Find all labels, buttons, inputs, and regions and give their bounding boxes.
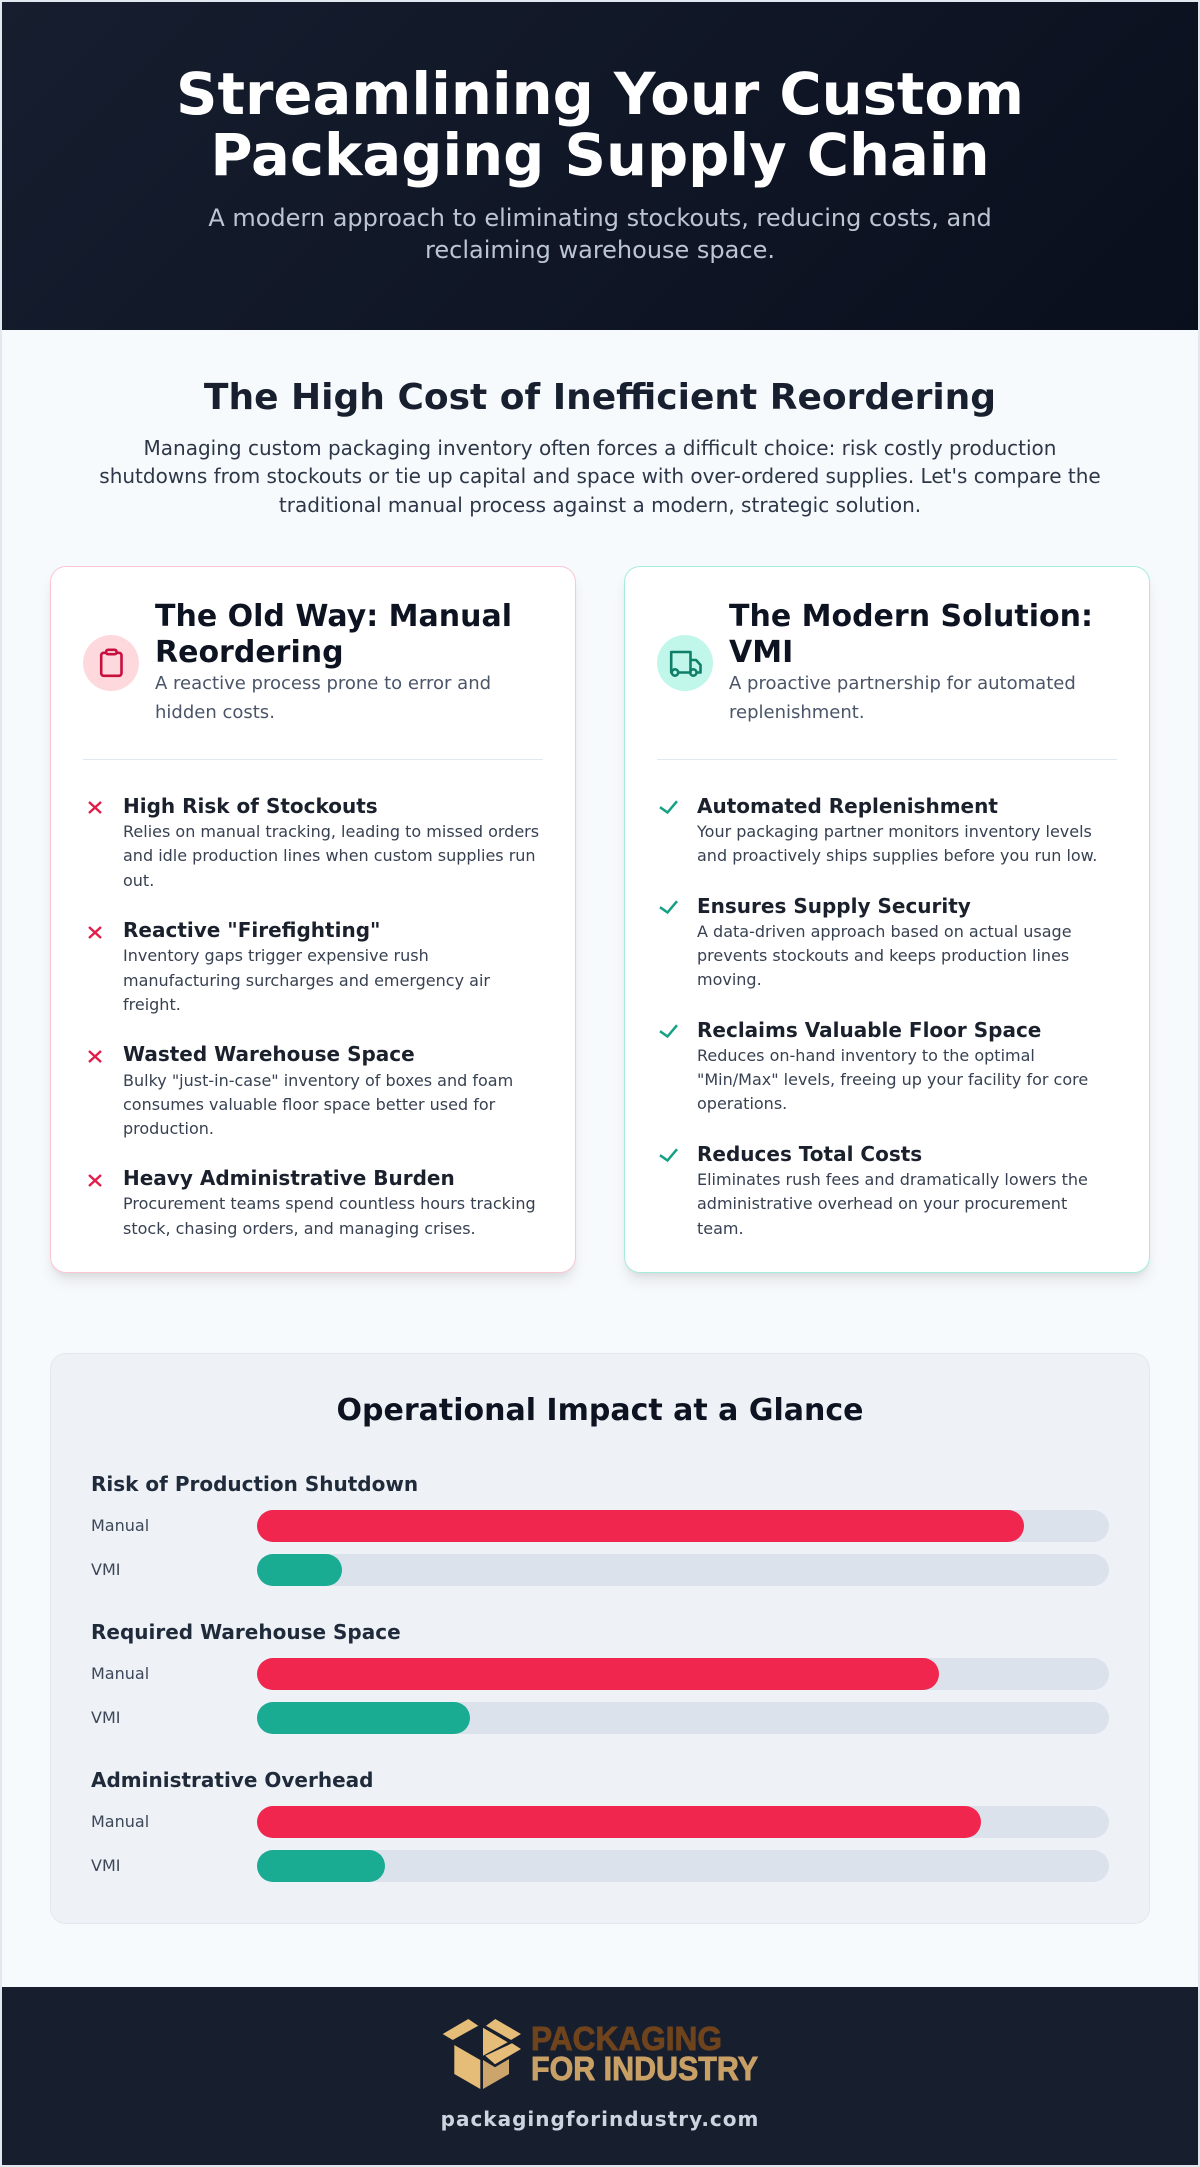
label: manual: Manual [91,1664,149,1683]
item: reduces total costs: administrative overhead on your procurement [697,1194,1067,1213]
panel: the modern solution [624,566,1150,1273]
icon: cross [88,801,102,814]
modern solution heading: VMI [729,634,793,670]
item: automated replenishment [659,794,1097,865]
item: reclaims valuable floor space: Reclaims Valuable Floor Space [697,1018,1041,1042]
icon: cross [88,1050,102,1063]
item: automated replenishment: and proactively ships supplies before you run low. [697,846,1097,865]
item: heavy administrative burden: Heavy Administrative Burden [123,1166,455,1190]
label: vmi: VMI [91,1856,120,1875]
label: vmi: VMI [91,1560,120,1579]
item: reactive firefighting: freight. [123,995,181,1014]
icon: cross [88,1174,102,1187]
item: automated replenishment: Your packaging partner monitors inventory levels [697,822,1092,841]
item: ensures supply security: prevents stockouts and keeps production lines [697,946,1069,965]
item: heavy administrative burden: stock, chasing orders, and managing crises. [123,1219,476,1238]
item: wasted warehouse space: Wasted Warehouse Space [123,1042,415,1066]
header band [2,2,1198,330]
footer band [2,1987,1198,2165]
title [176,61,1024,189]
item: reduces total costs: Eliminates rush fees and dramatically lowers the [697,1170,1088,1189]
item: reclaims valuable floor space: "Min/Max" levels, freeing up your facility for core [697,1070,1088,1089]
item: wasted warehouse space [88,1042,513,1138]
subtitle: A modern approach to eliminating stockouts, reducing costs, and [208,204,992,232]
item: reactive firefighting [88,918,490,1014]
group title: Risk of Production Shutdown [91,1472,418,1496]
subtitle [208,204,992,264]
bar: manual 90% [257,1510,1109,1542]
item: reduces total costs: Reduces Total Costs [697,1142,922,1166]
item: reactive firefighting: Inventory gaps trigger expensive rush [123,946,429,965]
intro text: traditional manual process against a modern, strategic solution. [279,493,921,517]
item: ensures supply security: moving. [697,970,762,989]
item: high risk of stockouts [88,794,539,890]
item: high risk of stockouts: High Risk of Stockouts [123,794,378,818]
bar group: administrative overhead [91,1768,1109,1882]
label: manual: Manual [91,1812,149,1831]
item: reclaims valuable floor space: operations. [697,1094,787,1113]
old way heading: Reordering [155,634,344,670]
logo: packaging for industry [442,2019,758,2089]
item: high risk of stockouts: and idle production lines when custom supplies run [123,846,536,865]
old way heading: The Old Way: Manual [155,598,512,634]
intro text: shutdowns from stockouts or tie up capital and space with over-ordered supplies. Let's compare the [99,464,1101,488]
item: reclaims valuable floor space [659,1018,1088,1113]
section heading: The High Cost of Inefficient Reordering [204,377,996,418]
title: Streamlining Your Custom [176,61,1024,128]
icon: check [659,1148,678,1162]
bar group: required warehouse space [91,1620,1109,1734]
website url: packagingforindustry.com [441,2107,759,2131]
item: heavy administrative burden: Procurement teams spend countless hours tracking [123,1194,536,1213]
modern solution subheading: replenishment. [729,702,865,723]
item: reactive firefighting: manufacturing surcharges and emergency air [123,971,490,990]
group title: Required Warehouse Space [91,1620,401,1644]
item: wasted warehouse space: Bulky "just-in-case" inventory of boxes and foam [123,1071,513,1090]
item: ensures supply security: A data-driven approach based on actual usage [697,922,1072,941]
item: ensures supply security: Ensures Supply Security [697,894,971,918]
bar: vmi 15% [257,1850,1109,1882]
bar group: risk of production shutdown [91,1472,1109,1586]
old way subheading: hidden costs. [155,702,275,723]
old way subheading [155,673,491,723]
label: manual: Manual [91,1516,149,1535]
logo wordmark [531,2020,758,2087]
bar: manual 80% [257,1658,1109,1690]
chart heading: Operational Impact at a Glance [336,1393,864,1428]
bar: vmi 10% [257,1554,1109,1586]
title: Packaging Supply Chain [210,122,990,189]
icon: truck [657,635,713,691]
icon: open box [443,2019,521,2089]
bar: vmi 25% [257,1702,1109,1734]
intro text [99,436,1101,517]
intro text: Managing custom packaging inventory often forces a difficult choice: risk costly production [144,436,1056,460]
modern solution heading [729,598,1093,670]
modern solution subheading [729,673,1076,723]
item: heavy administrative burden [88,1166,536,1238]
subtitle: reclaiming warehouse space. [425,236,775,264]
panel: the old way [50,566,576,1273]
bar: manual 85% [257,1806,1109,1838]
item: high risk of stockouts: Relies on manual tracking, leading to missed orders [123,822,539,841]
logo wordmark: PACKAGING [531,2020,722,2057]
icon: check [659,1024,678,1038]
modern solution heading: The Modern Solution: [729,598,1093,634]
panel: operational impact chart [50,1353,1150,1924]
item: reduces total costs: team. [697,1219,744,1238]
icon: check [659,900,678,914]
item: reactive firefighting: Reactive "Firefighting" [123,918,380,942]
group title: Administrative Overhead [91,1768,373,1792]
item: reclaims valuable floor space: Reduces on-hand inventory to the optimal [697,1046,1035,1065]
item: automated replenishment: Automated Replenishment [697,794,998,818]
old way heading [155,598,512,670]
item: wasted warehouse space: production. [123,1119,214,1138]
item: reduces total costs [659,1142,1088,1238]
old way subheading: A reactive process prone to error and [155,673,491,694]
modern solution subheading: A proactive partnership for automated [729,673,1076,694]
label: vmi: VMI [91,1708,120,1727]
item: wasted warehouse space: consumes valuable floor space better used for [123,1095,495,1114]
icon: check [659,800,678,814]
icon: cross [88,926,102,939]
item: ensures supply security [659,894,1072,989]
icon: clipboard [83,635,139,691]
item: high risk of stockouts: out. [123,871,154,890]
